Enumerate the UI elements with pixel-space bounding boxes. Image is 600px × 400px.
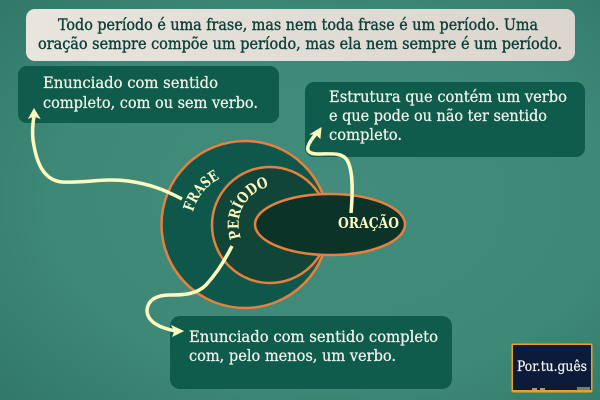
circle: frase xyxy=(162,141,328,308)
circle: período xyxy=(212,167,328,283)
label: frase: FRASE xyxy=(182,170,220,212)
panel: período definition: Enunciado com sentido completo xyxy=(189,328,438,346)
panel: oração definition: completo. xyxy=(329,126,402,144)
header text panel xyxy=(26,9,575,61)
arrow: período to definition xyxy=(147,246,232,336)
ellipse: oração xyxy=(255,194,405,255)
panel: frase definition: Enunciado com sentido xyxy=(43,74,218,92)
venn diagram xyxy=(160,140,406,310)
panel: oração definition: e que pode ou não ter sentido xyxy=(329,107,547,125)
logo: Por.tu.guês blackboard: Por.tu.guês xyxy=(517,359,587,375)
label: oração: ORAÇÃO xyxy=(338,213,399,232)
panel: oração definition xyxy=(305,82,585,157)
panel: frase definition xyxy=(18,66,279,123)
header text panel: oração sempre compõe um período, mas ela nem sempre é um período. xyxy=(38,35,562,53)
panel: oração definition: Estrutura que contém um verbo xyxy=(329,88,567,106)
logo: Por.tu.guês blackboard xyxy=(512,344,592,392)
label: período: PERÍODO xyxy=(228,177,268,240)
arrow: oração to definition xyxy=(308,128,352,213)
panel: frase definition: completo, com ou sem verbo. xyxy=(43,94,258,112)
header text panel: Todo período é uma frase, mas nem toda frase é um período. Uma xyxy=(58,16,538,34)
panel: período definition xyxy=(170,316,452,389)
panel: período definition: com, pelo menos, um verbo. xyxy=(189,347,396,365)
arrow: frase to definition xyxy=(29,109,182,199)
